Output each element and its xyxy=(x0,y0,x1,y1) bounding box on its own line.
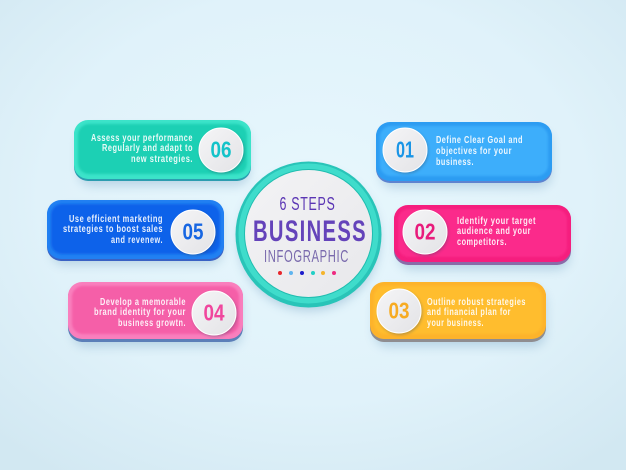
number badge 02 xyxy=(403,210,447,254)
text 03 xyxy=(427,297,526,329)
card 02: audience step xyxy=(394,205,571,270)
heading: business: BUSINESS xyxy=(253,215,367,248)
colour dots xyxy=(278,271,336,275)
text 05: and revenew. xyxy=(111,235,163,246)
text 06: Regularly and adapt to xyxy=(102,143,193,154)
text 04: Develop a memorable xyxy=(100,297,186,308)
text 04 xyxy=(94,297,186,329)
text 06: Assess your performance xyxy=(91,133,193,144)
card 03: financial step xyxy=(370,282,546,347)
number badge 05 xyxy=(171,210,215,254)
text 03: and financial plan for xyxy=(427,307,511,318)
text 01: objectives for your xyxy=(436,146,512,157)
text 03: your business. xyxy=(427,318,484,329)
text 06 xyxy=(91,133,193,165)
text 03: Outline robust strategies xyxy=(427,297,526,308)
central badge xyxy=(236,162,382,311)
number badge 01: 01 xyxy=(396,136,414,162)
number badge 03 xyxy=(377,289,421,333)
text 01: Define Clear Goal and xyxy=(436,135,523,146)
number badge 04 xyxy=(192,291,236,335)
number badge 03: 03 xyxy=(388,298,410,324)
card 01: goal step xyxy=(376,122,552,188)
text 06: new strategies. xyxy=(131,154,193,165)
text 01: business. xyxy=(436,157,474,168)
text 01 xyxy=(436,135,523,168)
text 02 xyxy=(457,216,536,248)
text 04: business growtn. xyxy=(118,318,186,329)
card 05: marketing step xyxy=(47,200,224,265)
number badge 04: 04 xyxy=(204,300,225,326)
number badge 02: 02 xyxy=(414,218,436,244)
text 05: strategies to boost sales xyxy=(63,224,163,235)
text 05: Use efficient marketing xyxy=(69,214,163,225)
text 02: Identify your target xyxy=(457,216,536,227)
card 06: performance step xyxy=(74,120,251,186)
text 04: brand identity for your xyxy=(94,307,186,318)
heading: 6 steps: 6 STEPS xyxy=(280,194,336,214)
text 02: audience and your xyxy=(457,226,531,237)
number badge 05: 05 xyxy=(182,218,204,244)
number badge 06: 06 xyxy=(210,136,232,162)
card 04: brand step xyxy=(68,282,243,347)
heading: infographic: INFOGRAPHIC xyxy=(264,246,349,266)
text 02: competitors. xyxy=(457,237,507,248)
number badge 06 xyxy=(199,128,243,172)
text 05 xyxy=(63,214,163,246)
number badge 01 xyxy=(383,128,427,172)
